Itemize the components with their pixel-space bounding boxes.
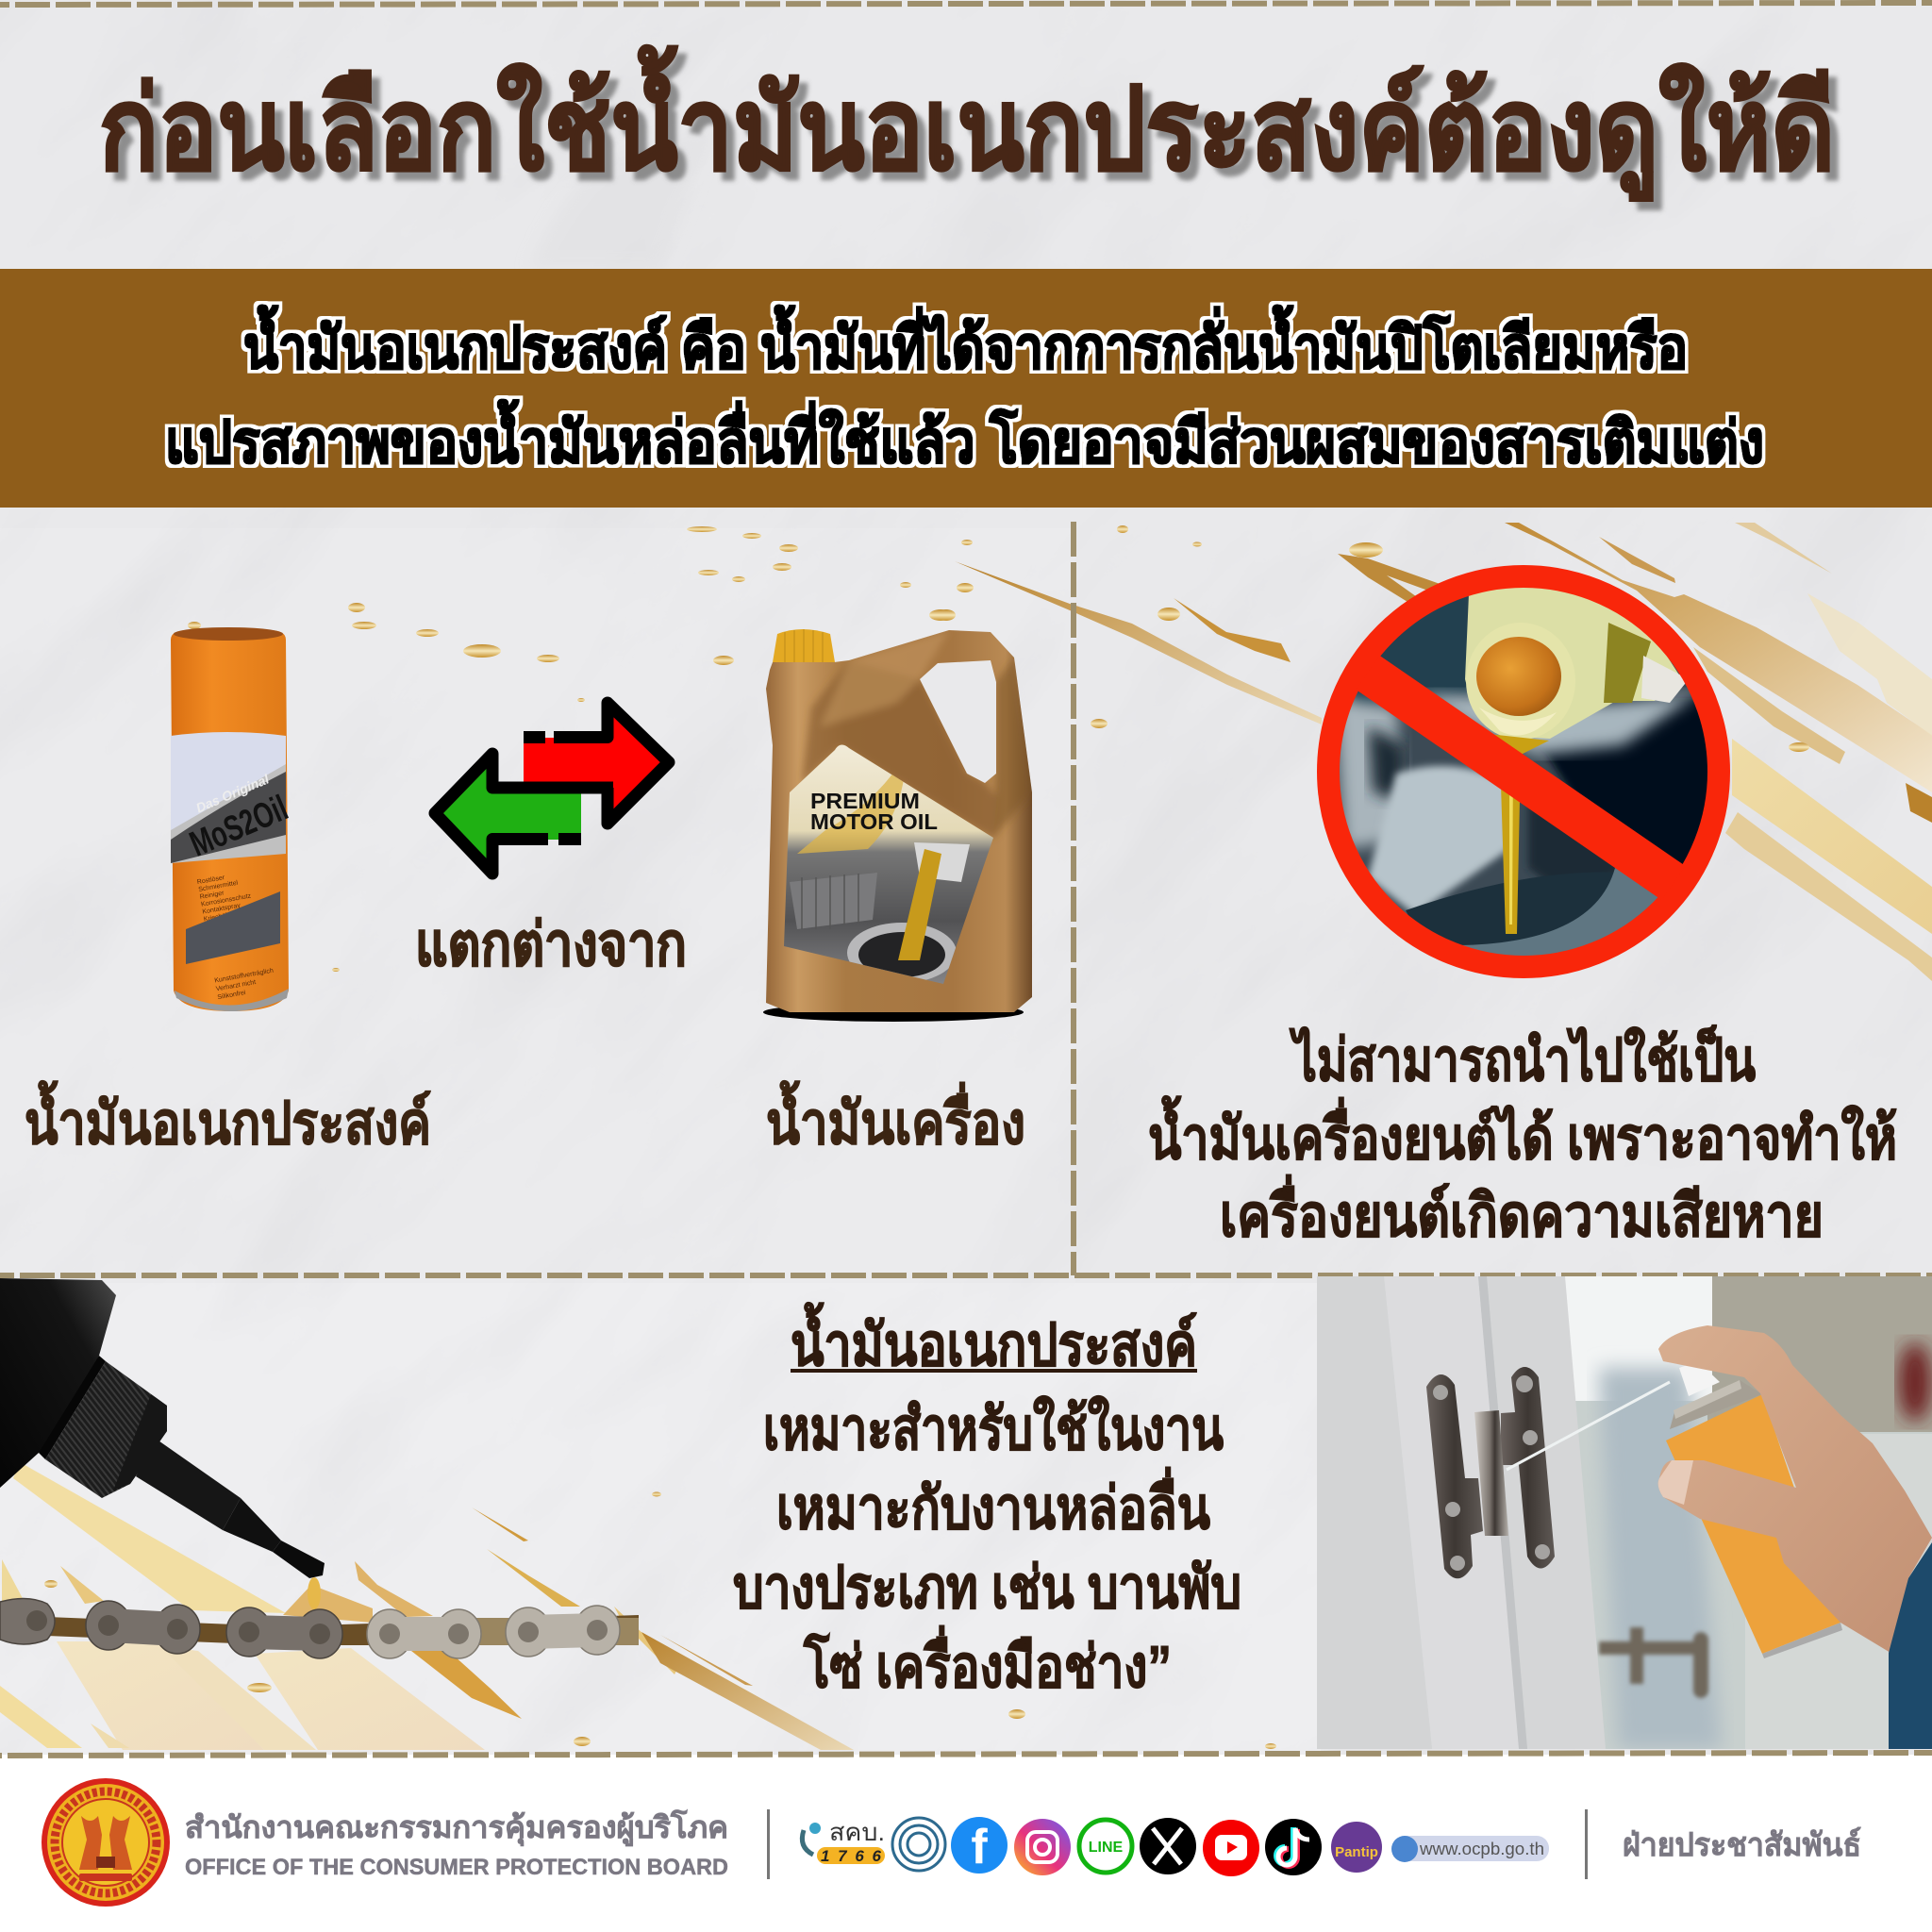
icon: pantip: Pantip	[1335, 1844, 1378, 1860]
label: differs from: แตกต่างจาก	[415, 910, 687, 978]
can feature list: Kunststoffverträglich	[214, 968, 274, 984]
jug label: PREMIUM	[810, 789, 920, 813]
comparison arrows	[435, 703, 669, 874]
caption: motor oil: น้ำมันเครื่อง	[766, 1080, 1025, 1157]
can label: MoS2Oil	[184, 789, 293, 864]
definition text: น้ำมันอเนกประสงค์ คือ น้ำมันที่ได้จากการกลั่นน้ำมันปิโตเลียมหรือ	[243, 305, 1688, 381]
usage body: เหมาะกับงานหล่อลื่น	[776, 1467, 1210, 1541]
prohibition photo: pouring oil	[1321, 566, 1726, 981]
usage body: เหมาะสำหรับใช้ในงาน	[763, 1395, 1224, 1462]
icon: facebook: f	[971, 1820, 988, 1874]
handle hole	[920, 660, 996, 783]
agency name: สำนักงานคณะกรรมการคุ้มครองผู้บริโภค	[185, 1809, 728, 1847]
hotline: สคบ.	[829, 1818, 885, 1846]
agency name: OFFICE OF THE CONSUMER PROTECTION BOARD	[185, 1855, 728, 1880]
icon: youtube	[1203, 1820, 1259, 1876]
jug shading	[802, 630, 1032, 838]
can feature list: Schmiermittel	[198, 880, 239, 893]
green arrow	[435, 754, 613, 874]
OCPB seal	[42, 1778, 170, 1907]
red arrow	[524, 703, 669, 824]
icon: line: LINE	[1089, 1840, 1124, 1856]
jug label	[810, 789, 938, 834]
can feature list	[196, 869, 277, 1001]
jug label: MOTOR OIL	[810, 809, 938, 834]
definition text: แปรสภาพของน้ำมันหล่อลื่นที่ใช้แล้ว โดยอาจมีส่วนผสมของสารเติมแต่ง	[165, 399, 1764, 475]
can feature list: Kriechöl	[203, 912, 228, 923]
usage body: โซ่ เครื่องมือช่าง”	[803, 1625, 1172, 1700]
photo: spraying door hinge	[1317, 1276, 1932, 1749]
hotline: 1766	[821, 1847, 882, 1865]
no symbol	[1328, 576, 1719, 967]
icon: facebook	[951, 1817, 1008, 1874]
bottle	[0, 1278, 116, 1488]
dashed divider: bottom	[0, 1753, 1932, 1756]
gold streaks: bottom left	[0, 1462, 854, 1750]
website pill: www.ocpb.go.th	[1419, 1840, 1544, 1858]
agency name	[185, 1809, 728, 1880]
can label: Das Original	[193, 771, 272, 815]
usage heading: น้ำมันอเนกประสงค์	[791, 1302, 1197, 1378]
jug cap	[773, 629, 835, 662]
icon: line	[1079, 1820, 1132, 1873]
oil bottle	[1465, 580, 1682, 739]
usage text	[733, 1302, 1241, 1700]
PR division: ฝ่ายประชาสัมพันธ์	[1623, 1826, 1861, 1863]
can feature list: Verharzt nicht	[215, 979, 257, 992]
door frame	[1317, 1276, 1432, 1749]
can feature list: Silikonfrei	[217, 990, 247, 1001]
spray can photo	[1666, 1361, 1842, 1658]
usage body	[733, 1395, 1241, 1700]
hinge	[1426, 1367, 1555, 1578]
jug window	[784, 745, 993, 984]
icon: CP circle	[892, 1818, 945, 1871]
blurred room	[1557, 1276, 1932, 1749]
warning text: ไม่สามารถนำไปใช้เป็น	[1289, 1024, 1756, 1093]
spray can: multi-purpose oil	[171, 627, 293, 1011]
dashed divider: top	[0, 3, 1932, 5]
usage body: บางประเภท เช่น บานพับ	[733, 1556, 1241, 1621]
footer	[42, 1778, 1861, 1907]
left captions	[25, 1080, 1025, 1157]
sleeve	[1889, 1542, 1932, 1749]
hotline	[802, 1818, 885, 1865]
spray straw	[1507, 1382, 1670, 1470]
gold streaks: right panel	[955, 523, 1932, 981]
warning text: เครื่องยนต์เกิดความเสียหาย	[1220, 1174, 1824, 1249]
can feature list: Korrosionsschutz	[201, 892, 252, 908]
can feature list: Kontaktspray	[202, 903, 242, 916]
lubricant bottle and chain photo	[0, 1278, 639, 1658]
icon: pantip	[1331, 1822, 1382, 1873]
can feature list: Rostlöser	[196, 874, 225, 886]
motor oil jug	[763, 629, 1032, 1022]
warning text	[1148, 1024, 1897, 1249]
gold droplets	[44, 525, 1809, 1749]
website pill	[1391, 1836, 1549, 1862]
icon: tiktok	[1265, 1819, 1322, 1875]
bike chain	[0, 1598, 639, 1658]
dashed divider: middle	[0, 1273, 1932, 1278]
can feature list: Reiniger	[199, 890, 225, 901]
definition text	[165, 305, 1764, 475]
can label	[176, 769, 293, 864]
definition band	[0, 269, 1932, 508]
icon: X	[1140, 1818, 1196, 1874]
hand	[1658, 1325, 1932, 1653]
caption: multi-purpose oil: น้ำมันอเนกประสงค์	[25, 1080, 431, 1157]
icon: instagram	[1014, 1819, 1071, 1875]
dashed divider: vertical	[1071, 522, 1076, 1275]
